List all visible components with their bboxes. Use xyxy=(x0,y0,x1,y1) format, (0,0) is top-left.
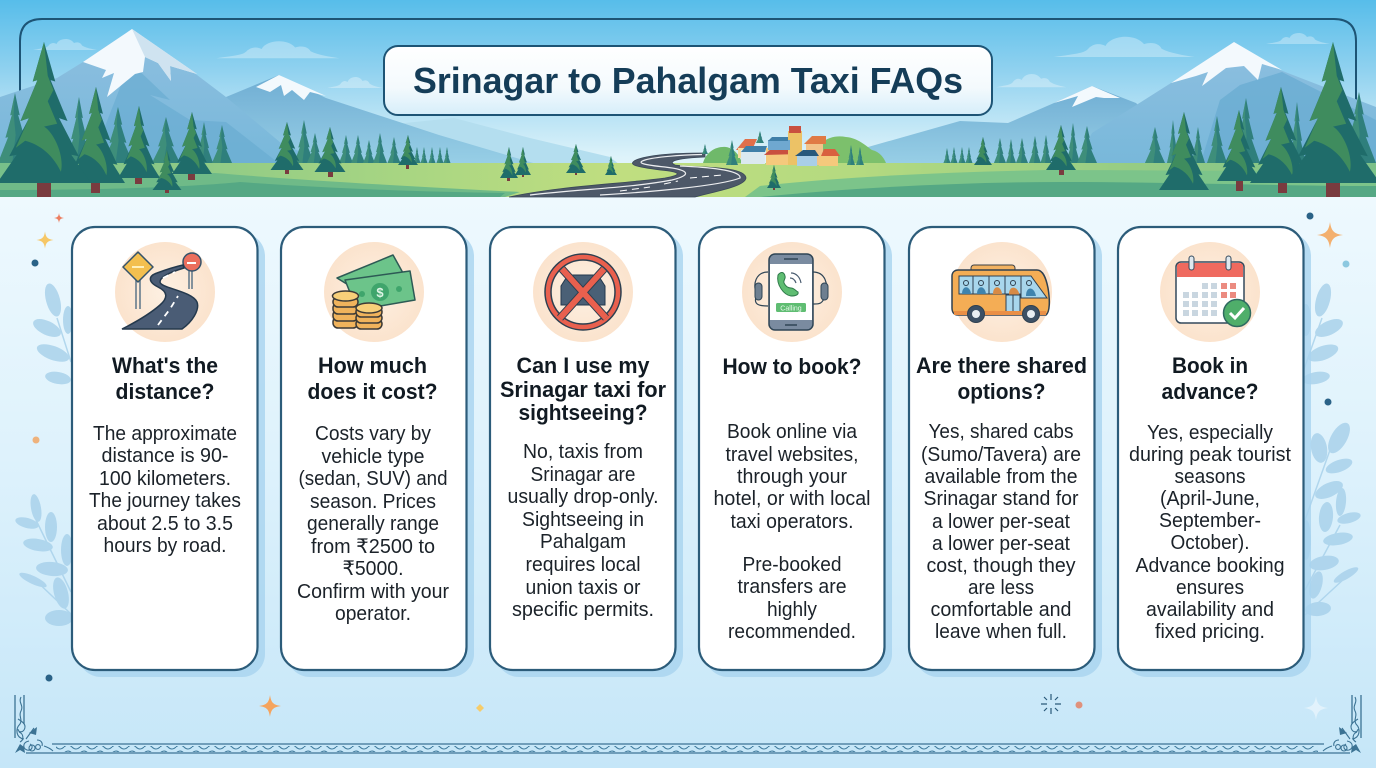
heading: Are there shared xyxy=(916,353,1087,378)
body text: September- xyxy=(1159,510,1261,532)
decorative leaves left xyxy=(14,282,73,626)
body text: Srinagar stand for xyxy=(924,488,1079,510)
meadow xyxy=(0,163,1376,197)
icon: cash and coins xyxy=(324,242,424,342)
body text: The journey takes xyxy=(89,490,241,512)
body text: distance is 90- xyxy=(102,445,228,467)
icon: cash and coins: $ xyxy=(376,285,384,300)
body text: highly xyxy=(767,599,817,621)
header landscape xyxy=(0,0,1376,197)
village xyxy=(702,126,886,166)
body text: availability and xyxy=(1146,599,1274,621)
body text: comfortable and xyxy=(930,599,1072,621)
body text: No, taxis from xyxy=(523,441,643,463)
icon: winding road with signs xyxy=(115,242,215,342)
body text: a lower per-seat xyxy=(932,533,1070,555)
background trees xyxy=(0,92,1376,163)
background xyxy=(0,197,1376,768)
icon: calendar with check xyxy=(1160,242,1260,342)
heading: advance? xyxy=(1162,379,1258,404)
heading xyxy=(1162,353,1258,404)
heading xyxy=(916,353,1087,404)
bottom ornamental border xyxy=(15,695,1361,753)
body text: Srinagar are xyxy=(530,464,636,486)
body text: Pre-booked xyxy=(742,554,842,576)
body text: transfers are xyxy=(738,576,846,598)
body text xyxy=(89,423,241,557)
icon: bus with passengers xyxy=(952,242,1052,342)
heading: Can I use my xyxy=(516,353,650,378)
body text: October). xyxy=(1170,532,1250,554)
heading: options? xyxy=(958,379,1046,404)
body text xyxy=(297,423,449,625)
body text: (Sumo/Tavera) are xyxy=(921,444,1081,466)
heading: How much xyxy=(318,353,427,378)
body text: requires local xyxy=(526,554,640,576)
body text: hotel, or with local xyxy=(714,488,870,510)
body text: taxi operators. xyxy=(730,511,854,533)
body text: from ₹2500 to xyxy=(311,536,435,558)
body text: Book online via xyxy=(727,421,858,443)
body text: ₹5000. xyxy=(342,558,404,580)
decorative leaves right xyxy=(1301,282,1362,617)
body text xyxy=(508,441,658,621)
body text xyxy=(714,421,870,643)
body text: 100 kilometers. xyxy=(99,468,231,490)
panel: booking xyxy=(699,227,892,677)
panel: shared options xyxy=(909,227,1102,677)
heading xyxy=(112,353,218,404)
body text: The approximate xyxy=(93,423,237,445)
body text: ensures xyxy=(1176,577,1244,599)
body text: through your xyxy=(737,466,847,488)
body text: available from the xyxy=(924,466,1078,488)
icon: crossed-out car xyxy=(533,242,633,342)
panel: sightseeing xyxy=(490,227,683,677)
body text: fixed pricing. xyxy=(1155,621,1265,643)
body text: usually drop-only. xyxy=(508,486,658,508)
heading: How to book? xyxy=(722,354,862,379)
body text: during peak tourist xyxy=(1129,444,1291,466)
body text: union taxis or xyxy=(526,577,641,599)
icon: phone with headset: Calling xyxy=(780,306,802,312)
body text: a lower per-seat xyxy=(932,511,1070,533)
title box xyxy=(384,46,992,115)
body text: cost, though they xyxy=(926,555,1076,577)
body text: operator. xyxy=(335,603,411,625)
body text: Yes, shared cabs xyxy=(928,421,1074,443)
body text: (April-June, xyxy=(1160,488,1260,510)
heading: sightseeing? xyxy=(518,400,648,425)
decorative sparkles and dots xyxy=(32,212,1350,720)
body text: generally range xyxy=(307,513,439,535)
body text xyxy=(1129,422,1291,643)
body text: Advance booking xyxy=(1136,555,1284,577)
body text: Yes, especially xyxy=(1147,422,1273,444)
body text xyxy=(921,421,1081,643)
heading: What's the xyxy=(112,353,218,378)
clouds xyxy=(33,33,1330,88)
heading: distance? xyxy=(116,379,214,404)
heading: does it cost? xyxy=(308,379,438,404)
body text: Confirm with your xyxy=(297,581,449,603)
heading: Book in xyxy=(1172,353,1248,378)
mountains left xyxy=(0,29,620,165)
heading xyxy=(308,353,438,404)
title: Srinagar to Pahalgam Taxi FAQs xyxy=(413,60,963,101)
body text: Sightseeing in xyxy=(522,509,644,531)
body text: travel websites, xyxy=(726,444,858,466)
body text: season. Prices xyxy=(310,491,436,513)
body text: about 2.5 to 3.5 xyxy=(97,513,233,535)
heading: Srinagar taxi for xyxy=(500,377,666,402)
body text: leave when full. xyxy=(935,621,1067,643)
body text: (sedan, SUV) and xyxy=(298,468,448,490)
heading xyxy=(500,353,666,425)
panel: cost xyxy=(281,227,474,677)
foreground trees xyxy=(0,42,1376,197)
body text: hours by road. xyxy=(104,535,226,557)
body text: Pahalgam xyxy=(540,531,626,553)
panel: distance xyxy=(72,227,265,677)
body text: vehicle type xyxy=(322,446,424,468)
header frame xyxy=(20,19,1356,165)
body text: recommended. xyxy=(728,621,856,643)
road xyxy=(509,153,746,197)
icon: phone with headset xyxy=(742,242,842,342)
panel: book in advance xyxy=(1118,227,1311,677)
body text: seasons xyxy=(1174,466,1246,488)
body text: Costs vary by xyxy=(315,423,431,445)
mountains right xyxy=(850,42,1376,165)
body text: are less xyxy=(968,577,1034,599)
body text: specific permits. xyxy=(512,599,654,621)
